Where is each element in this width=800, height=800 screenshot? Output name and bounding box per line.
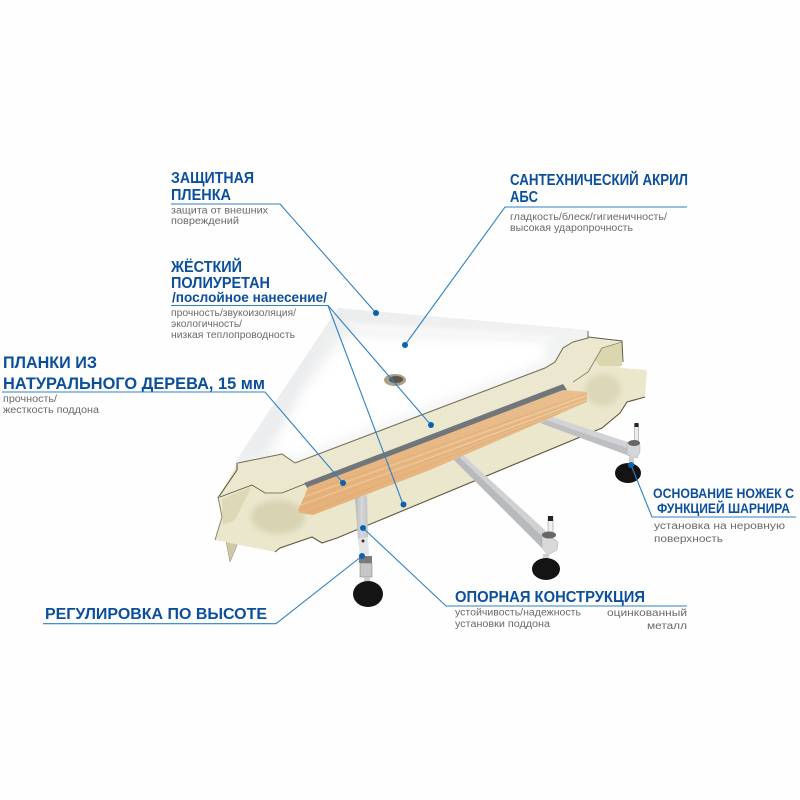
label: natural wood slats: прочность/ bbox=[3, 394, 57, 405]
label: sanitary ABS acrylic: гладкость/блеск/гигиеничность/ bbox=[510, 211, 667, 223]
leg: front left bbox=[353, 495, 383, 607]
label: sanitary ABS acrylic bbox=[402, 170, 688, 348]
label: natural wood slats: жесткость поддона bbox=[3, 405, 99, 416]
label: sanitary ABS acrylic: АБС bbox=[510, 189, 538, 206]
label: natural wood slats bbox=[2, 354, 346, 486]
label: height adjustment bbox=[43, 553, 365, 624]
label: hinged leg base bbox=[628, 462, 796, 545]
label: hinged leg base: поверхность bbox=[654, 534, 723, 545]
label: rigid polyurethane: ПОЛИУРЕТАН bbox=[171, 275, 270, 292]
label: rigid polyurethane: /послойное нанесение/ bbox=[172, 290, 327, 305]
label: rigid polyurethane: экологичность/ bbox=[171, 319, 242, 330]
label: hinged leg base: установка на неровную bbox=[654, 521, 786, 532]
label: protective film: повреждений bbox=[171, 216, 239, 227]
label: natural wood slats: НАТУРАЛЬНОГО ДЕРЕВА, 15 мм bbox=[3, 375, 265, 393]
label: support structure: установки поддона bbox=[455, 619, 550, 630]
label: support structure: ОПОРНАЯ КОНСТРУКЦИЯ bbox=[455, 589, 645, 606]
lower polyurethane sheet bbox=[215, 338, 647, 562]
label: rigid polyurethane: низкая теплопроводность bbox=[171, 330, 295, 341]
label: rigid polyurethane: ЖЁСТКИЙ bbox=[170, 257, 242, 276]
white acrylic surface bbox=[235, 308, 588, 463]
label: support structure bbox=[360, 525, 687, 632]
legs: galvanized support frame bbox=[353, 417, 641, 607]
label: sanitary ABS acrylic: САНТЕХНИЧЕСКИЙ АКРИЛ bbox=[510, 170, 688, 189]
label: height adjustment: РЕГУЛИРОВКА ПО ВЫСОТЕ bbox=[45, 606, 267, 623]
label: support structure: оцинкованный bbox=[607, 608, 687, 619]
label: protective film: защита от внешних bbox=[171, 206, 268, 216]
leg: rear right bbox=[540, 417, 641, 483]
label: protective film: ПЛЕНКА bbox=[171, 187, 231, 204]
wood plank bbox=[298, 390, 587, 515]
label: support structure: устойчивость/надежность bbox=[455, 608, 581, 618]
grey strip bbox=[304, 384, 567, 489]
label: protective film: ЗАЩИТНАЯ bbox=[171, 170, 254, 187]
label: natural wood slats: ПЛАНКИ ИЗ bbox=[3, 354, 97, 372]
upper polyurethane layer bbox=[218, 337, 623, 498]
label: support structure: металл bbox=[647, 621, 687, 632]
label: protective film bbox=[171, 170, 379, 316]
leg: front centre bbox=[452, 455, 560, 580]
illustration: corner shower tray cutaway bbox=[215, 308, 647, 607]
label: rigid polyurethane bbox=[170, 257, 434, 508]
drain bbox=[384, 374, 406, 386]
label: sanitary ABS acrylic: высокая ударопрочность bbox=[510, 223, 633, 234]
label: rigid polyurethane: прочность/звукоизоляция/ bbox=[171, 308, 296, 319]
